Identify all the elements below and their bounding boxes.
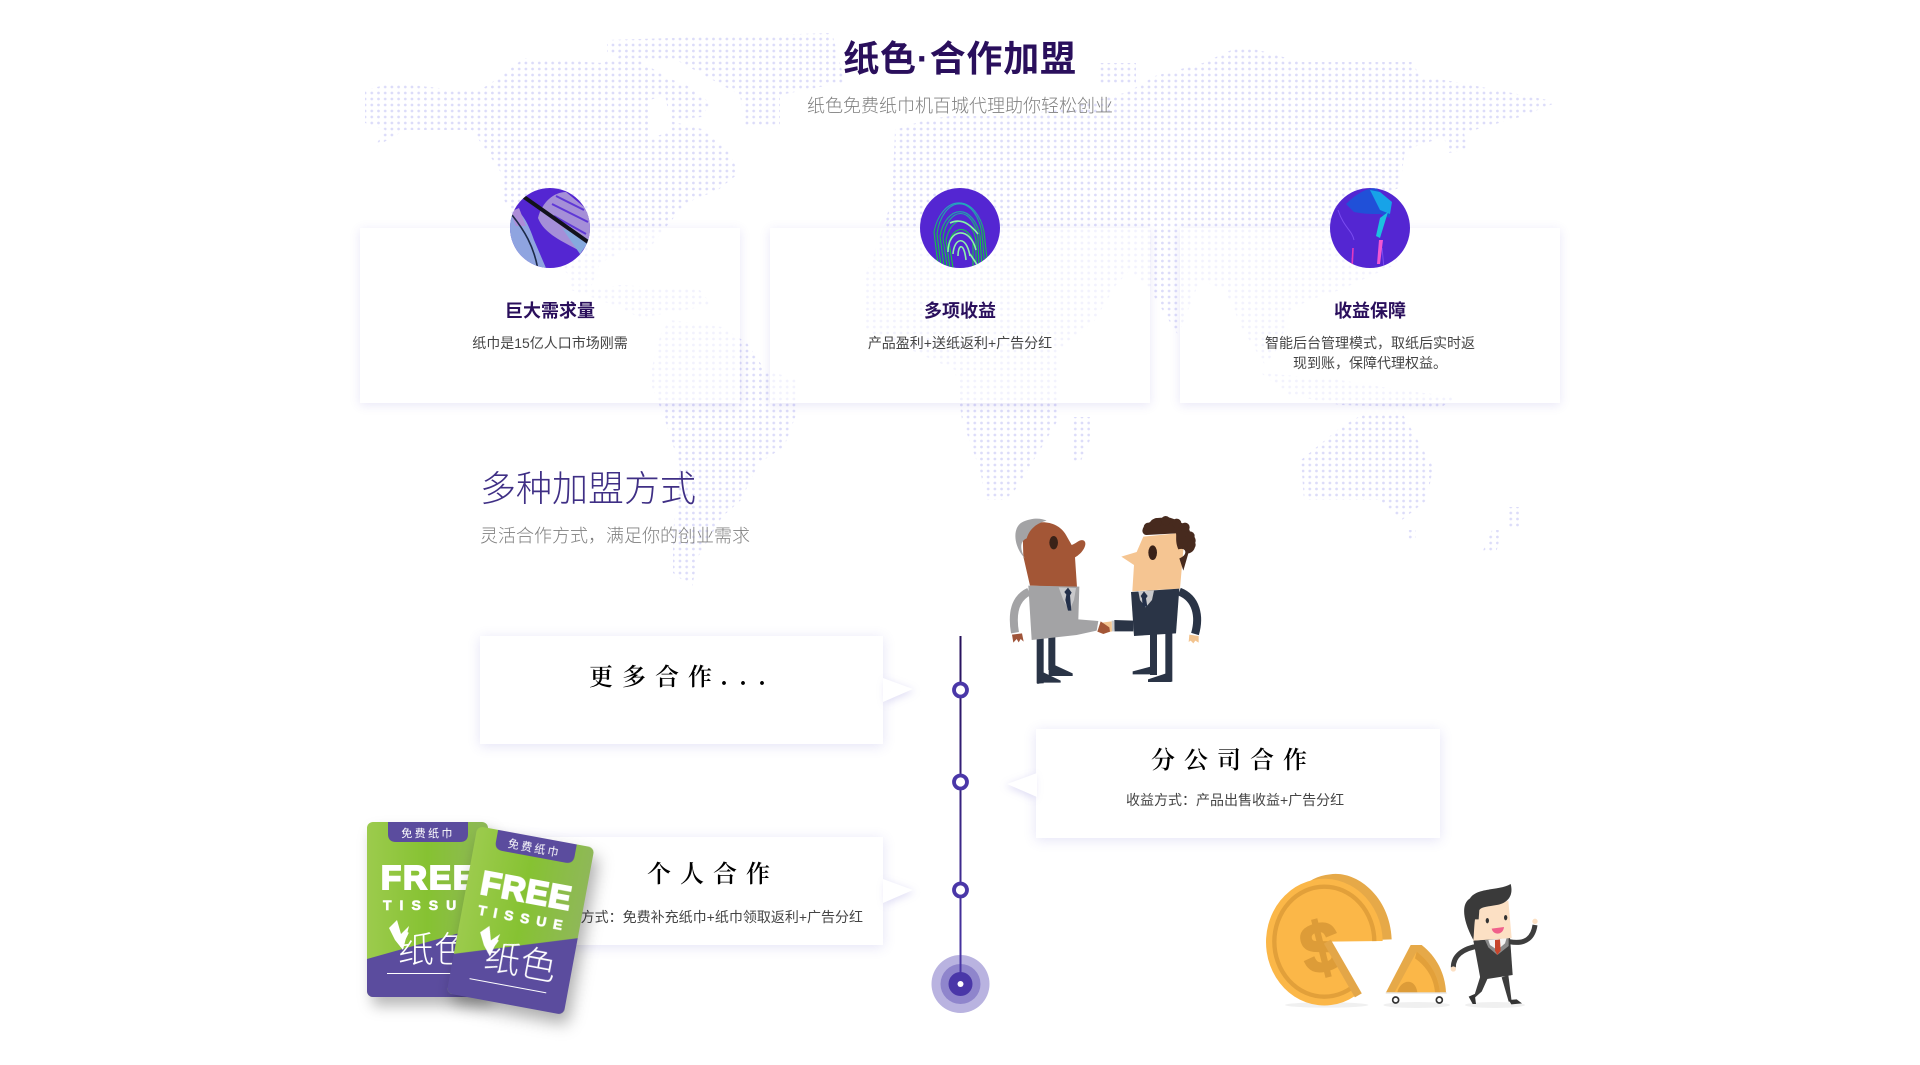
shadows xyxy=(1285,1002,1525,1008)
heading: 巨大需求量 xyxy=(505,301,595,321)
panel: income guarantee xyxy=(1180,228,1560,403)
section heading: 多种加盟方式 xyxy=(480,468,696,509)
illustration: free tissue packs xyxy=(364,822,606,1032)
panel: multiple income xyxy=(770,228,1150,403)
back pack xyxy=(367,822,488,997)
front pack: FREE xyxy=(478,864,575,917)
businessman xyxy=(1451,884,1538,1004)
panel: branch cooperation xyxy=(1036,729,1440,838)
left man xyxy=(1012,519,1098,684)
arrow xyxy=(882,678,912,704)
arrow xyxy=(882,879,912,904)
text xyxy=(1265,335,1475,370)
coin slice on cart xyxy=(1386,945,1447,1003)
text: 现到账，保障代理权益。 xyxy=(1293,354,1447,370)
illustration: handshake xyxy=(1010,516,1202,684)
back pack: 免费纸巾 xyxy=(401,826,455,840)
heading: 分公司合作 xyxy=(1151,748,1316,774)
subtitle: 纸色免费纸巾机百城代理助你轻松创业 xyxy=(807,96,1113,116)
coin xyxy=(1266,874,1392,1005)
heading: 个人合作 xyxy=(647,862,779,888)
title: 纸色·合作加盟 xyxy=(843,38,1077,79)
text: 纸巾是15亿人口市场刚需 xyxy=(472,335,628,351)
back pack: 纸色 xyxy=(398,929,470,970)
right man xyxy=(1097,516,1199,682)
panel: huge demand xyxy=(360,228,740,403)
text: 产品盈利+送纸返利+广告分红 xyxy=(868,335,1052,351)
illustration: coin and businessman xyxy=(1266,874,1538,1008)
icon: fingerprint circle xyxy=(920,188,1000,268)
heading: 多项收益 xyxy=(924,301,996,321)
text: 收益方式：产品出售收益+广告分红 xyxy=(1126,792,1344,808)
icon: fist circle xyxy=(1330,188,1410,268)
arrow xyxy=(1008,774,1038,799)
text: 智能后台管理模式，取纸后实时返 xyxy=(1265,335,1475,351)
section subtitle: 灵活合作方式，满足你的创业需求 xyxy=(480,526,750,546)
back pack: TISSUE xyxy=(383,897,482,913)
text: 收益方式：免费补充纸巾+纸巾领取返利+广告分红 xyxy=(553,909,863,925)
heading: 更多合作... xyxy=(589,665,778,691)
back pack: FREE xyxy=(381,859,477,896)
icon: feather circle xyxy=(510,188,590,268)
heading: 收益保障 xyxy=(1334,301,1406,321)
panel: personal cooperation xyxy=(480,837,883,945)
panel: more cooperation xyxy=(480,636,883,744)
front pack: 纸色 xyxy=(481,935,560,988)
front pack: TISSUE xyxy=(477,902,571,934)
front pack xyxy=(447,826,594,1015)
front pack: 免费纸巾 xyxy=(507,836,562,860)
coin: $ xyxy=(1293,905,1349,990)
